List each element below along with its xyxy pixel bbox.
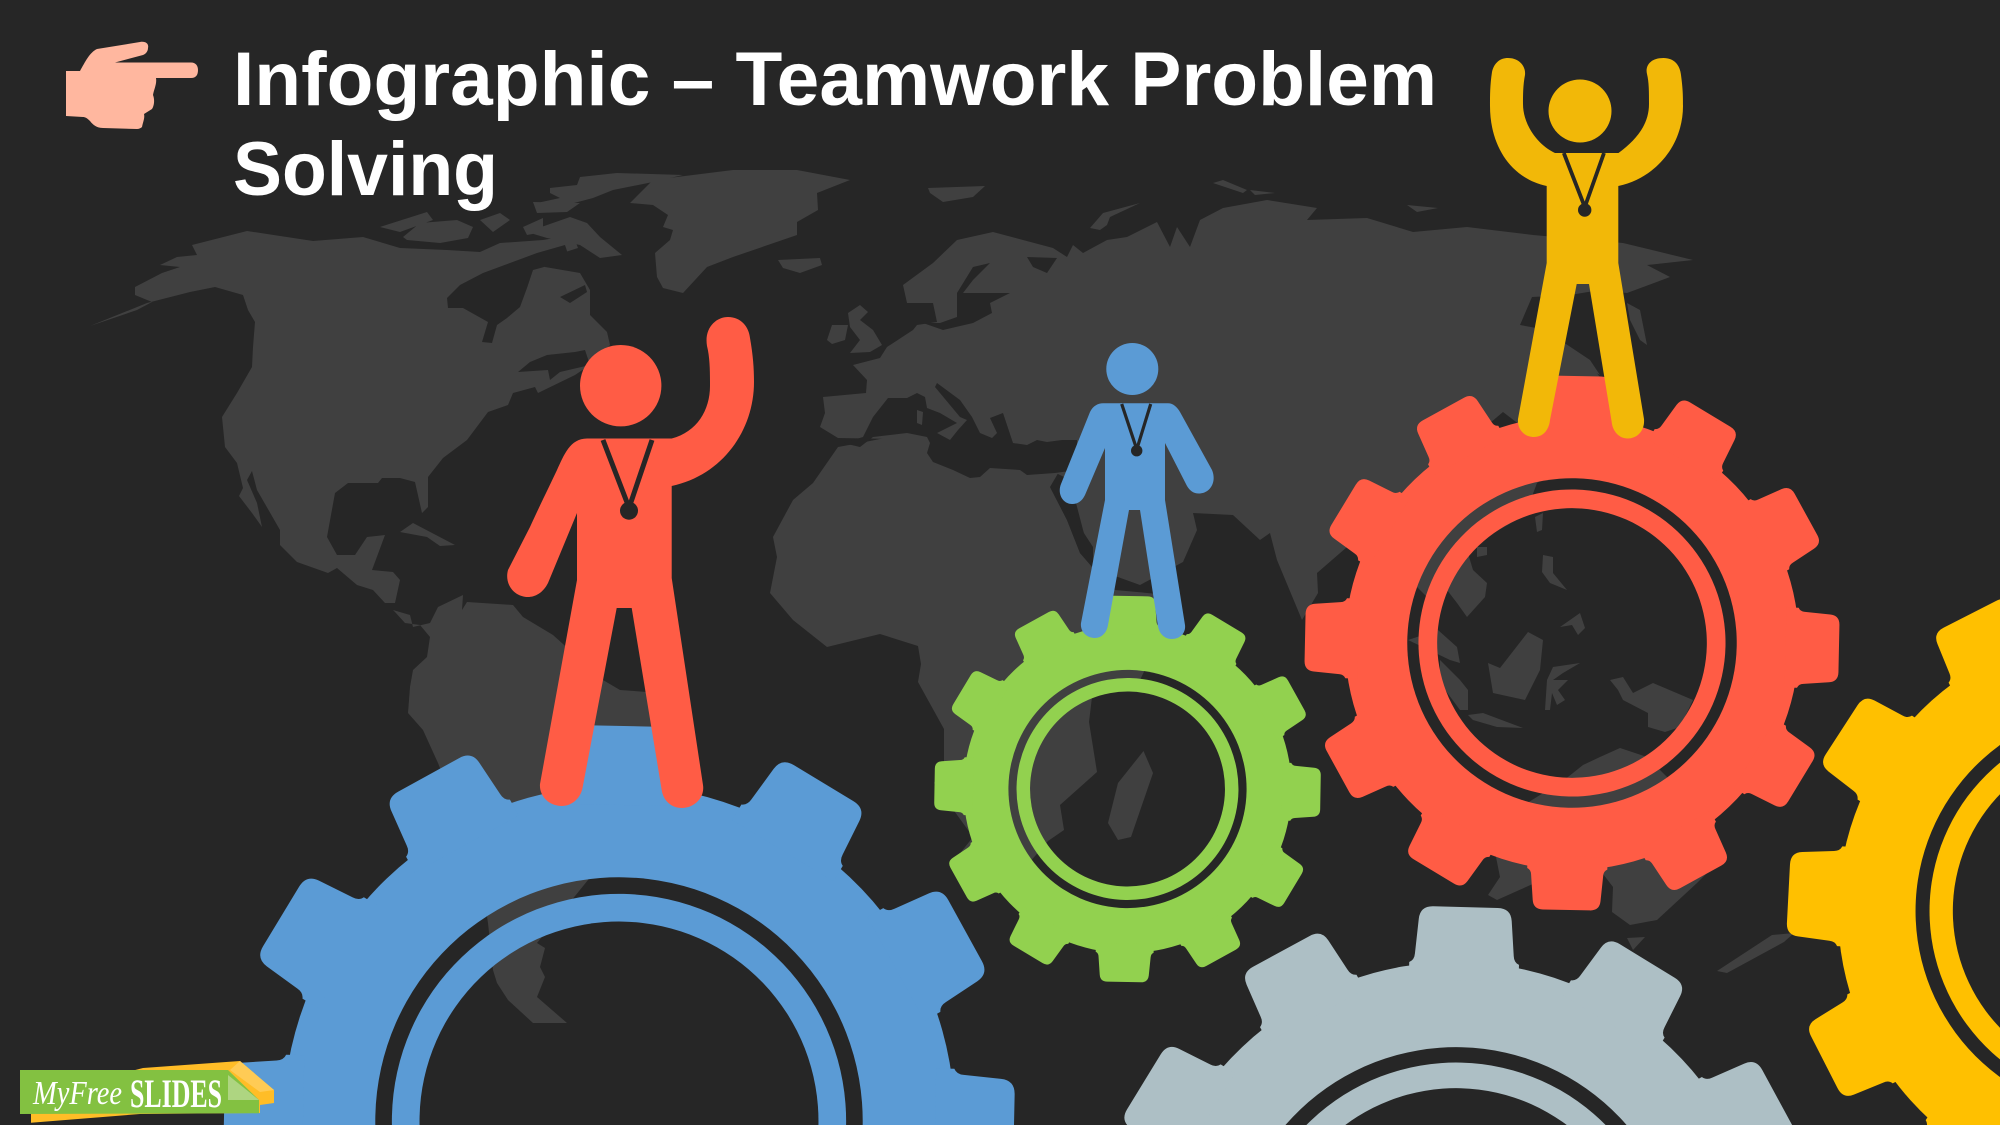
gear: grey (1081, 898, 1831, 1125)
map: Iceland, Britain, Ireland (778, 258, 882, 353)
map: Africa (770, 430, 1180, 895)
gear: red (1299, 370, 1845, 916)
map: North America (90, 231, 610, 603)
title (233, 37, 1437, 212)
map: Australia and New Zealand (1488, 748, 1794, 973)
title: Solving (233, 127, 498, 212)
map: Southeast Asia islands (1408, 513, 1693, 732)
title: Infographic – Teamwork Problem (233, 37, 1437, 122)
map: inland seas (447, 245, 1520, 568)
map: Cuba (400, 523, 455, 546)
figure: yellow person with raised arms (1490, 58, 1683, 438)
map: Eurasia (820, 200, 1693, 620)
gear: green (931, 593, 1324, 985)
map: South America (383, 595, 655, 1023)
map: Arctic islands (380, 173, 683, 258)
gear: yellow (1771, 561, 2000, 1125)
logo: MyFreeSlides: SLIDES (130, 1071, 222, 1116)
icon: pointing hand (66, 42, 198, 129)
gear: blue (216, 718, 1022, 1125)
figure: red person waving (507, 317, 754, 808)
map: Corsica and Sardinia (917, 410, 923, 425)
map: Greenland (630, 170, 850, 293)
logo: MyFreeSlides: MyFree (32, 1075, 122, 1112)
map: Madagascar (1108, 751, 1153, 840)
map: northern Eurasian islands (928, 180, 1647, 375)
figure: blue person standing (1060, 343, 1214, 639)
logo: MyFreeSlides (20, 1061, 274, 1123)
world map (90, 170, 1794, 1023)
